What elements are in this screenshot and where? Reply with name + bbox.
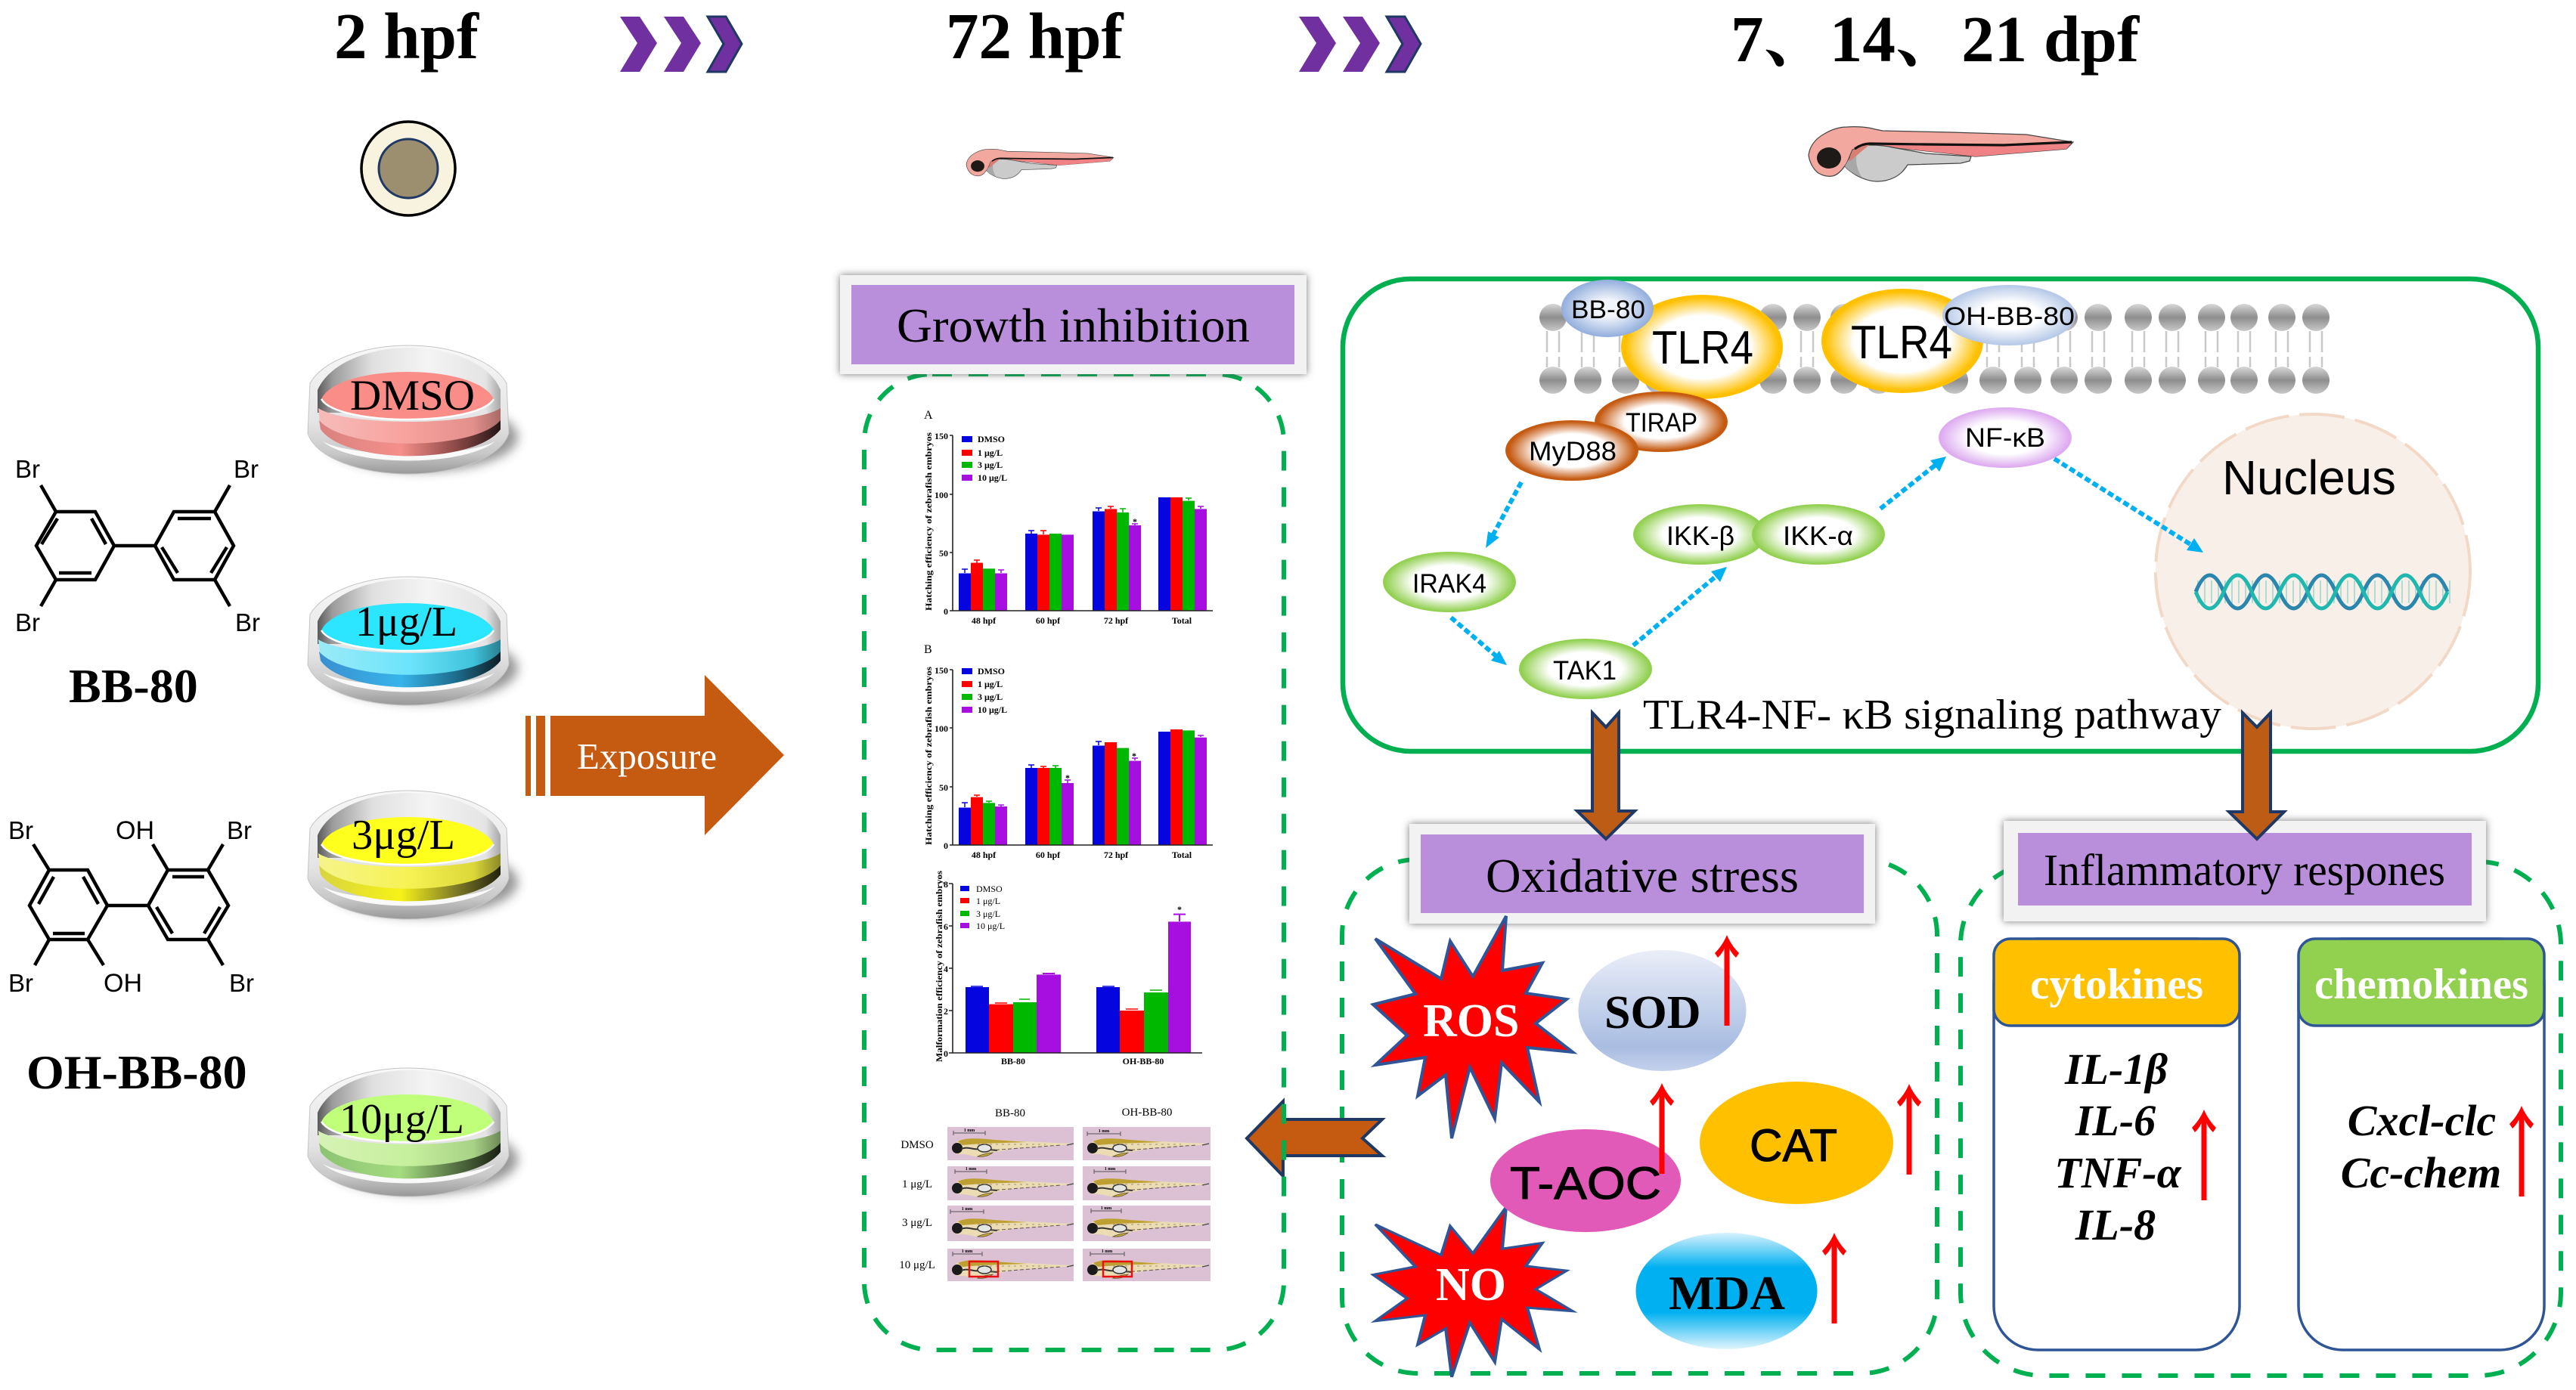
- panel: cytokines card: TNF-α: [2054, 1148, 2182, 1197]
- arrow: T-AOC up: [1650, 1083, 1674, 1174]
- chart: hatching efficiency B: 60 hpf: [1036, 850, 1061, 860]
- node: TAK1: [1519, 639, 1652, 699]
- node: TLR4 left: [1621, 295, 1783, 399]
- panel: cytokines card: IL-6: [2075, 1096, 2156, 1145]
- chart: hatching efficiency A: DMSO: [978, 434, 1005, 444]
- arrow: oxidative stress to growth inhibition: [1247, 1101, 1382, 1176]
- node: T-AOC: T-AOC: [1510, 1158, 1661, 1209]
- heading: Oxidative stress: Oxidative stress: [1486, 849, 1799, 902]
- arrow: chevrons 1: [620, 17, 742, 72]
- chart: hatching efficiency A: A: [924, 409, 933, 422]
- chart: hatching efficiency B: [923, 643, 1213, 860]
- icon: BB-80 molecule: Br: [15, 608, 40, 636]
- node: IKK-alpha: IKK-α: [1783, 522, 1853, 551]
- chart: malformation efficiency C: 1 μg/L: [976, 896, 1000, 906]
- chart: malformation efficiency C: OH-BB-80: [1123, 1056, 1164, 1066]
- chart: hatching efficiency B: 150: [935, 665, 948, 676]
- chart: hatching efficiency B: 1 μg/L: [978, 679, 1003, 689]
- chart: malformation efficiency C: *: [1177, 904, 1182, 915]
- panel: chemokines card: Cxcl-clc: [2348, 1096, 2496, 1145]
- icon: BB-80 molecule: Br: [235, 608, 260, 636]
- chart: hatching efficiency B: Total: [1172, 850, 1192, 860]
- icon: lipid membrane: [1539, 304, 2330, 394]
- arrow: MDA up: [1822, 1233, 1846, 1323]
- node: TLR4 right: [1821, 289, 1983, 393]
- arrow: NF-kB to nucleus: [2054, 459, 2203, 553]
- node: T-AOC: [1490, 1129, 1681, 1232]
- title: 2 hpf: 2 hpf: [334, 0, 479, 73]
- chart: malformation efficiency C: BB-80: [1001, 1056, 1025, 1066]
- chart: larval morphology photo grid: OH-BB-80: [1122, 1107, 1172, 1119]
- node: TLR4 right: TLR4: [1851, 317, 1952, 369]
- chart: larval morphology photo grid: 3 μg/L: [902, 1217, 932, 1229]
- chart: hatching efficiency A: [923, 409, 1213, 626]
- node: MyD88: MyD88: [1529, 437, 1617, 466]
- icon: OH-BB-80 molecule: Br: [229, 969, 254, 997]
- chart: hatching efficiency B: 100: [935, 723, 948, 734]
- node: IKK-beta: IKK-β: [1666, 522, 1734, 551]
- node: IKK-beta: [1633, 504, 1766, 565]
- icon: dish 10 ug/L: [308, 1068, 518, 1197]
- chart: hatching efficiency B: 48 hpf: [972, 850, 997, 860]
- title: 72 hpf: 72 hpf: [946, 0, 1124, 73]
- chart: hatching efficiency B: 0: [944, 841, 948, 851]
- icon: dish DMSO: [308, 345, 518, 474]
- chart: larval morphology photo grid: 1 μg/L: [902, 1178, 932, 1190]
- arrow: pathway to inflammation: [2229, 713, 2284, 839]
- arrow: IRAK4 to TAK1: [1451, 618, 1507, 665]
- icon: OH-BB-80 molecule: Br: [8, 816, 33, 844]
- node: TIRAP: [1595, 392, 1728, 452]
- arrow: Exposure: Exposure: [577, 735, 717, 777]
- panel: TLR4-NF-kB pathway box: [1343, 279, 2538, 751]
- chart: malformation efficiency C: 3 μg/L: [976, 909, 1000, 919]
- node: TAK1: TAK1: [1553, 656, 1617, 686]
- chart: hatching efficiency B: *: [1132, 751, 1136, 761]
- panel: chemokines card: chemokines: [2314, 961, 2528, 1008]
- chart: hatching efficiency B: 50: [939, 782, 948, 793]
- chart: hatching efficiency A: *: [1133, 516, 1137, 527]
- node: SOD: [1579, 950, 1747, 1071]
- chart: hatching efficiency A: 48 hpf: [972, 615, 997, 626]
- chart: larval morphology photo grid: 1 mm: [1101, 1206, 1111, 1211]
- icon: OH-BB-80 molecule: OH: [104, 969, 142, 998]
- arrow: chevrons 2: [1299, 17, 1421, 72]
- icon: ROS burst: ROS: [1423, 995, 1519, 1047]
- icon: large larva dpf: [1809, 127, 2073, 181]
- icon: dish 3 ug/L: 3μg/L: [352, 812, 455, 859]
- chart: hatching efficiency A: 1 μg/L: [978, 447, 1003, 458]
- chart: hatching efficiency B: 3 μg/L: [978, 692, 1003, 702]
- panel: chemokines card: Cc-chem: [2341, 1148, 2501, 1197]
- chart: larval morphology photo grid: BB-80: [995, 1107, 1025, 1119]
- chart: malformation efficiency C: [934, 871, 1202, 1066]
- node: BB-80 ligand: BB-80: [1571, 296, 1645, 324]
- arrow: pathway to oxidative stress: [1577, 713, 1635, 839]
- chart: larval morphology photo grid: 1 mm: [964, 1128, 975, 1133]
- arrow: CAT up: [1897, 1084, 1921, 1175]
- heading: Growth inhibition: [840, 275, 1307, 374]
- chart: larval morphology photo grid: 1 mm: [962, 1249, 972, 1254]
- icon: OH-BB-80 molecule: Br: [227, 816, 252, 844]
- chart: malformation efficiency C: DMSO: [976, 884, 1003, 894]
- heading: Inflammatory respones: [2004, 821, 2486, 921]
- icon: embryo egg: [361, 122, 455, 215]
- icon: NO burst: NO: [1436, 1259, 1506, 1311]
- node: NF-kB: NF-κB: [1965, 423, 2045, 453]
- arrow: SOD up: [1715, 935, 1739, 1026]
- label: OH-BB-80: OH-BB-80: [26, 1045, 247, 1099]
- chart: larval morphology photo grid: [899, 1107, 1211, 1281]
- chart: hatching efficiency B: 10 μg/L: [978, 704, 1007, 715]
- icon: nucleus: [2156, 414, 2470, 729]
- chart: hatching efficiency B: *: [1065, 772, 1070, 783]
- chart: hatching efficiency A: 10 μg/L: [978, 472, 1007, 483]
- icon: nucleus: Nucleus: [2222, 450, 2396, 505]
- chart: hatching efficiency A: 150: [935, 431, 948, 441]
- chart: hatching efficiency A: 100: [935, 490, 948, 500]
- node: IKK-alpha: [1752, 504, 1885, 565]
- chart: hatching efficiency B: B: [924, 643, 932, 656]
- arrow: TAK1 to IKK-beta: [1633, 567, 1727, 645]
- icon: BB-80 molecule: Br: [234, 455, 259, 483]
- node: MyD88: [1505, 420, 1638, 481]
- chart: hatching efficiency A: 72 hpf: [1104, 615, 1129, 626]
- icon: OH-BB-80 molecule: Br: [8, 969, 33, 997]
- chart: larval morphology photo grid: 1 mm: [1099, 1129, 1109, 1134]
- icon: dish 1 ug/L: 1μg/L: [355, 599, 457, 645]
- node: TIRAP: TIRAP: [1626, 408, 1697, 438]
- chart: hatching efficiency A: 50: [939, 548, 948, 559]
- arrow: IKK-alpha to NF-kB: [1880, 457, 1946, 509]
- chart: hatching efficiency A: 0: [944, 606, 948, 617]
- chart: hatching efficiency A: 60 hpf: [1036, 615, 1061, 626]
- chart: malformation efficiency C: 0: [944, 1048, 948, 1059]
- chart: larval morphology photo grid: DMSO: [901, 1139, 934, 1151]
- text: pathway caption: TLR4-NF- κB signaling pathway: [1643, 692, 2221, 738]
- panel: cytokines card: IL-8: [2075, 1200, 2156, 1249]
- icon: BB-80 molecule: [15, 455, 260, 636]
- node: IRAK4: [1383, 552, 1516, 612]
- node: OH-BB-80 ligand: OH-BB-80: [1944, 302, 2075, 331]
- chart: larval morphology photo grid: 1 mm: [962, 1207, 972, 1212]
- arrow: Exposure: [525, 675, 784, 835]
- node: MDA: [1636, 1233, 1818, 1349]
- icon: dish 1 ug/L: [308, 577, 518, 705]
- icon: OH-BB-80 molecule: OH: [116, 816, 154, 845]
- icon: ROS burst: [1373, 916, 1573, 1138]
- chart: malformation efficiency C: 4: [944, 964, 948, 974]
- chart: larval morphology photo grid: 1 mm: [1102, 1249, 1112, 1254]
- panel: chemokines card: [2299, 939, 2544, 1350]
- panel: cytokines card: cytokines: [2030, 961, 2203, 1008]
- chart: malformation efficiency C: Malformation efficiency of zebrafish embryos: [934, 871, 944, 1062]
- icon: DNA helix: [2196, 575, 2455, 608]
- node: IRAK4: IRAK4: [1412, 569, 1486, 599]
- node: CAT: CAT: [1750, 1120, 1837, 1171]
- chart: hatching efficiency B: DMSO: [978, 666, 1005, 676]
- heading: Inflammatory respones: Inflammatory respones: [2044, 845, 2445, 895]
- chart: malformation efficiency C: 8: [944, 879, 948, 890]
- panel: inflammatory dashed border: [1961, 862, 2561, 1376]
- panel: cytokines card: IL-1β: [2064, 1045, 2168, 1094]
- icon: BB-80 molecule: Br: [15, 455, 40, 483]
- panel: growth inhibition dashed border: [864, 374, 1284, 1350]
- chart: hatching efficiency B: Hatching efficiency of zebrafish embryos: [923, 667, 934, 845]
- arrow: MyD88 to IRAK4: [1486, 482, 1521, 548]
- title: 7, 14, 21 dpf: 7、14、21 dpf: [1731, 2, 2140, 76]
- panel: oxidative stress dashed border: [1342, 859, 1937, 1373]
- icon: small larva 72 hpf: [966, 149, 1114, 178]
- node: NF-kB: [1939, 407, 2072, 468]
- node: CAT: [1700, 1082, 1893, 1204]
- node: MDA: MDA: [1669, 1266, 1785, 1320]
- node: OH-BB-80 ligand: [1942, 285, 2075, 345]
- icon: dish DMSO: DMSO: [350, 372, 475, 419]
- node: BB-80 ligand: [1561, 280, 1654, 337]
- chart: larval morphology photo grid: 1 mm: [966, 1167, 976, 1172]
- chart: larval morphology photo grid: 1 mm: [1105, 1167, 1115, 1172]
- chart: larval morphology photo grid: 10 μg/L: [899, 1259, 935, 1271]
- chart: malformation efficiency C: 2: [944, 1006, 948, 1017]
- icon: dish 10 ug/L: 10μg/L: [339, 1096, 464, 1143]
- node: TLR4 left: TLR4: [1652, 322, 1753, 374]
- node: SOD: SOD: [1604, 987, 1700, 1039]
- chart: hatching efficiency B: 72 hpf: [1104, 850, 1129, 860]
- heading: Oxidative stress: [1409, 824, 1875, 924]
- chart: malformation efficiency C: 6: [944, 921, 948, 932]
- icon: NO burst: [1373, 1207, 1573, 1377]
- icon: OH-BB-80 molecule: [8, 816, 254, 998]
- chart: hatching efficiency A: 3 μg/L: [978, 460, 1003, 470]
- chart: hatching efficiency A: Total: [1172, 615, 1192, 626]
- panel: cytokines card: [1994, 939, 2240, 1350]
- chart: hatching efficiency A: Hatching efficiency of zebrafish embryos: [923, 432, 934, 611]
- label: BB-80: BB-80: [69, 659, 198, 713]
- heading: Growth inhibition: Growth inhibition: [897, 299, 1250, 352]
- chart: malformation efficiency C: 10 μg/L: [976, 921, 1005, 931]
- icon: dish 3 ug/L: [308, 791, 518, 919]
